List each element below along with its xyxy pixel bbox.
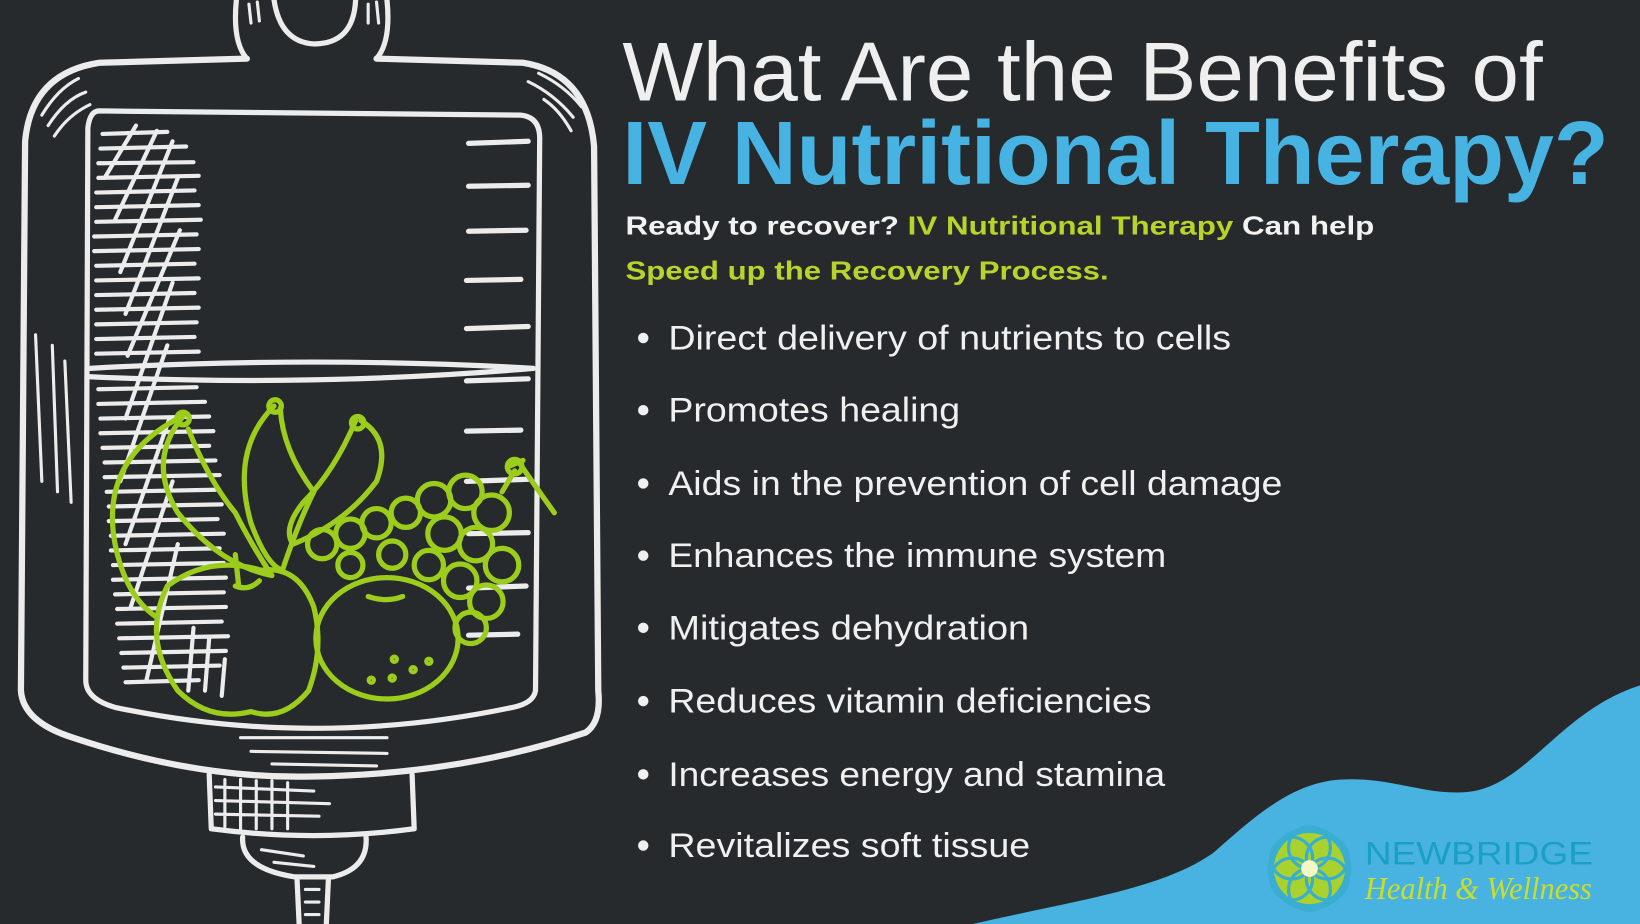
banana left <box>163 416 272 576</box>
bullet list: Aids in the prevention of cell damage <box>668 465 1282 503</box>
port <box>243 837 366 877</box>
bullet list: Direct delivery of nutrients to cells <box>668 320 1231 358</box>
side strokes <box>36 73 582 502</box>
orange <box>316 578 458 699</box>
tube <box>297 879 328 924</box>
blue wave <box>973 685 1640 924</box>
title line 1: What Are the Benefits of <box>622 24 1543 118</box>
bullet list: Mitigates dehydration <box>668 609 1029 647</box>
bullet list: Promotes healing <box>668 392 960 430</box>
hanger <box>235 0 388 59</box>
bullet list <box>638 320 1282 865</box>
bullet list: Increases energy and stamina <box>668 756 1166 794</box>
inner chamber <box>86 111 540 728</box>
hatching <box>94 126 228 696</box>
logo text: NEWBRIDGE <box>1365 835 1593 871</box>
illustration: fruits <box>112 400 554 714</box>
illustration: IV bag <box>21 0 599 924</box>
banana center <box>244 406 314 570</box>
apple <box>156 565 318 714</box>
logo <box>1268 827 1593 910</box>
liquid surface <box>90 362 533 380</box>
outer bag <box>21 59 599 777</box>
logo icon <box>1268 827 1351 910</box>
neck <box>209 774 414 836</box>
banana right <box>289 421 382 544</box>
title line 2: IV Nutritional Therapy? <box>622 104 1609 204</box>
bullet list: Revitalizes soft tissue <box>668 827 1030 865</box>
subtitle: Speed up the Recovery Process. <box>625 255 1109 285</box>
bullet list: Reduces vitamin deficiencies <box>668 683 1152 721</box>
logo: Health & Wellness <box>1364 871 1592 906</box>
grapes <box>308 529 337 559</box>
bullet list: Enhances the immune system <box>668 537 1166 575</box>
subtitle <box>625 210 1374 285</box>
measurement ticks <box>466 141 528 635</box>
bottom hatch <box>241 738 387 766</box>
subtitle: Ready to recover? IV Nutritional Therapy Can help <box>625 210 1374 240</box>
